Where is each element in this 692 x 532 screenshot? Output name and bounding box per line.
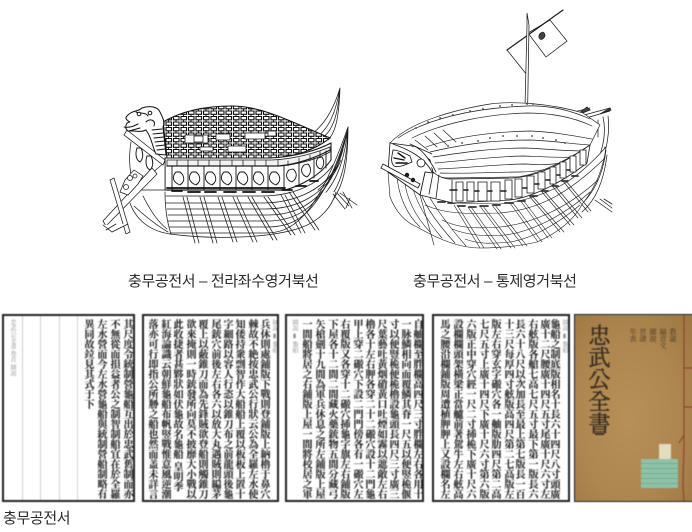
open deck xyxy=(390,103,600,178)
document page 1: 不無從而損益者公之制智制船宜在於全羅 xyxy=(108,319,119,499)
stern tips xyxy=(533,107,612,212)
document page 4: 龜船之制底版相名十長六十四尺八寸頭廣 xyxy=(548,319,559,499)
document page 4: 七尺五寸上廣十四尺下廣十尺六寸第六版 xyxy=(477,319,488,499)
cover contents list xyxy=(629,328,677,350)
cover binding lines xyxy=(678,314,692,502)
mast xyxy=(524,13,529,147)
gun wall xyxy=(420,145,590,203)
document page 2 xyxy=(142,314,279,502)
document page 3: 一脉鱗相向而覆鱗其脊一尺五以便竪桅偃 xyxy=(399,319,410,499)
document page 1: 其尺度令統制營龜船互出於忠武舊制而亦 xyxy=(121,319,132,499)
document page 3: 甲上穿二礮穴下設二門門傍各有一礮穴左 xyxy=(351,319,362,499)
document page 4: 右舷版各艙七高七尺五寸最下第一版長六 xyxy=(526,319,537,499)
dragon head box xyxy=(381,143,436,195)
bow spars and anchor xyxy=(103,130,165,234)
gun deck wall xyxy=(165,143,331,192)
document page 2: 欲來掩則一時銃發所向莫不披靡大小戰以 xyxy=(184,319,195,499)
cover contents list: 圖說 xyxy=(649,328,657,342)
document page 4: 六版正中穿穴經一尺二寸揷桅下廣十尺六 xyxy=(464,319,475,499)
document page 3: 一間船將居之右鋪版上屋一間將校居之軍 xyxy=(300,319,311,499)
document page 1: 左水營而今左水營龜船與統制營船制略有 xyxy=(95,319,106,499)
oars xyxy=(454,181,591,249)
flag xyxy=(507,10,567,75)
document page 2: 兵休則處鋪版下戰則登鋪版上納櫓于鼻穴 xyxy=(258,319,269,499)
document page 2: 此收捷者甚夥狀如伏龜故名龜船 皇明季 xyxy=(171,319,182,492)
bow wall xyxy=(130,142,165,192)
caption: Jeolla turtle ship: 충무공전서 – 전라좌수영거북선 xyxy=(128,273,318,290)
document page 2: 棘故不絶按忠武公行狀云公為全羅左水使 xyxy=(246,319,257,499)
document page 4: 十三尺每厚四寸舷版高四尺第二七高版左 xyxy=(502,319,513,499)
document page 3: 櫓各十左右胛各穿二十二礮穴設十二門龜 xyxy=(363,319,374,499)
ship illustrations xyxy=(102,9,612,250)
document page 4: 圖說 ▮ 龜船 xyxy=(561,319,567,353)
illustration: Tongyeong turtle ship xyxy=(381,10,612,249)
document page 4: 廣十二尺腰廣十四尺五寸尾廣十尺六寸左 xyxy=(538,319,549,499)
document page 3: 矢槍劍十九間為軍兵休息之所左鋪版上屋 xyxy=(313,319,324,499)
cover contents list: 世譜 xyxy=(639,328,647,342)
document page 3: 右覆版又各穿十二礮穴揷龜字旗左右鋪版 xyxy=(338,319,349,499)
document page 3: 下屋各十二間二間藏火藥銃物五間分藏弓 xyxy=(326,319,337,499)
caption: Chungmugong collection: 충무공전서 xyxy=(3,510,70,527)
dome openings xyxy=(185,131,276,152)
document page 1 xyxy=(2,314,135,502)
hull xyxy=(388,147,606,248)
oars xyxy=(183,192,319,243)
document page 2: 落亦可行即指公所刱之船也然而盖未詳言 xyxy=(146,319,157,499)
document page 4: 設欄欄頭架橫梁正當艫前著駕牛左右舷高 xyxy=(451,319,462,499)
document page 3: 自舳欄至胖欄高四尺三寸胖欄左右各用十 xyxy=(411,319,422,499)
caption: Tongyeong turtle ship: 충무공전서 – 통제영거북선 xyxy=(413,273,577,290)
document page 2: 圖說 ▮ 龜船 xyxy=(271,319,277,353)
document page 1: 忠武公全書 卷首 圖說 xyxy=(9,319,15,376)
document page 3: 圖說 ▮ 龜船 xyxy=(291,319,297,353)
document page 4: 馬之腰沿欄鋪版周遭植胛胛上又設欄名左 xyxy=(438,319,449,499)
illustration: Jeolla left navy turtle ship xyxy=(103,88,357,243)
cover contents list: 教諭 xyxy=(669,328,677,342)
stern tips xyxy=(312,88,348,212)
dragon head xyxy=(124,107,166,155)
document page 2: 紅海論識云朝鮮龜船布帆竪戰惟意風逆潮 xyxy=(159,319,170,499)
deck hatch planks xyxy=(410,130,456,154)
turtle dome xyxy=(163,106,330,158)
document page 4: 長六十八尺以次加長至最上第七版長一百 xyxy=(513,319,524,499)
document page 2: 知倭持衆剽智作大船船上覆以板板上置十 xyxy=(233,319,244,499)
book cover xyxy=(574,314,692,502)
cover contents list: 綸音文 xyxy=(659,328,667,349)
document page 2: 尾銃穴前後左右各六以放大丸遇賊則編茅 xyxy=(209,319,220,499)
document page 2: 字細路以容人行恣以錐刀布之前龍頭後龜 xyxy=(221,319,232,499)
deck studs xyxy=(416,104,565,146)
rudder xyxy=(333,192,357,209)
document page 3 xyxy=(285,314,424,502)
document page 4: 版左右穿玄字礮穴各一舳版肋四尺第二高 xyxy=(489,319,500,499)
document page 3: 寸以便豎桅便桅櫓設龜頭長四尺三寸廣三 xyxy=(387,319,398,499)
cream shelf tag xyxy=(659,444,671,460)
book cover: 年表 xyxy=(629,328,637,342)
cover title: 忠武公全書 xyxy=(586,324,611,434)
hull planks xyxy=(130,127,348,237)
bow planks xyxy=(388,172,466,246)
document page 4 xyxy=(432,314,570,502)
document page 3: 尺葉藝吐黃烟硝黃口吐煙如霧以遮敵左右 xyxy=(375,319,386,499)
teal library label xyxy=(641,459,678,488)
document page 1: 異同故竝見其式于下 xyxy=(82,319,93,409)
document page 2: 覆上以蔽錐刀而為先鋒賊欲登船則觸錐刀 xyxy=(196,319,207,499)
volume mark xyxy=(595,433,604,435)
oar ports xyxy=(438,176,578,207)
